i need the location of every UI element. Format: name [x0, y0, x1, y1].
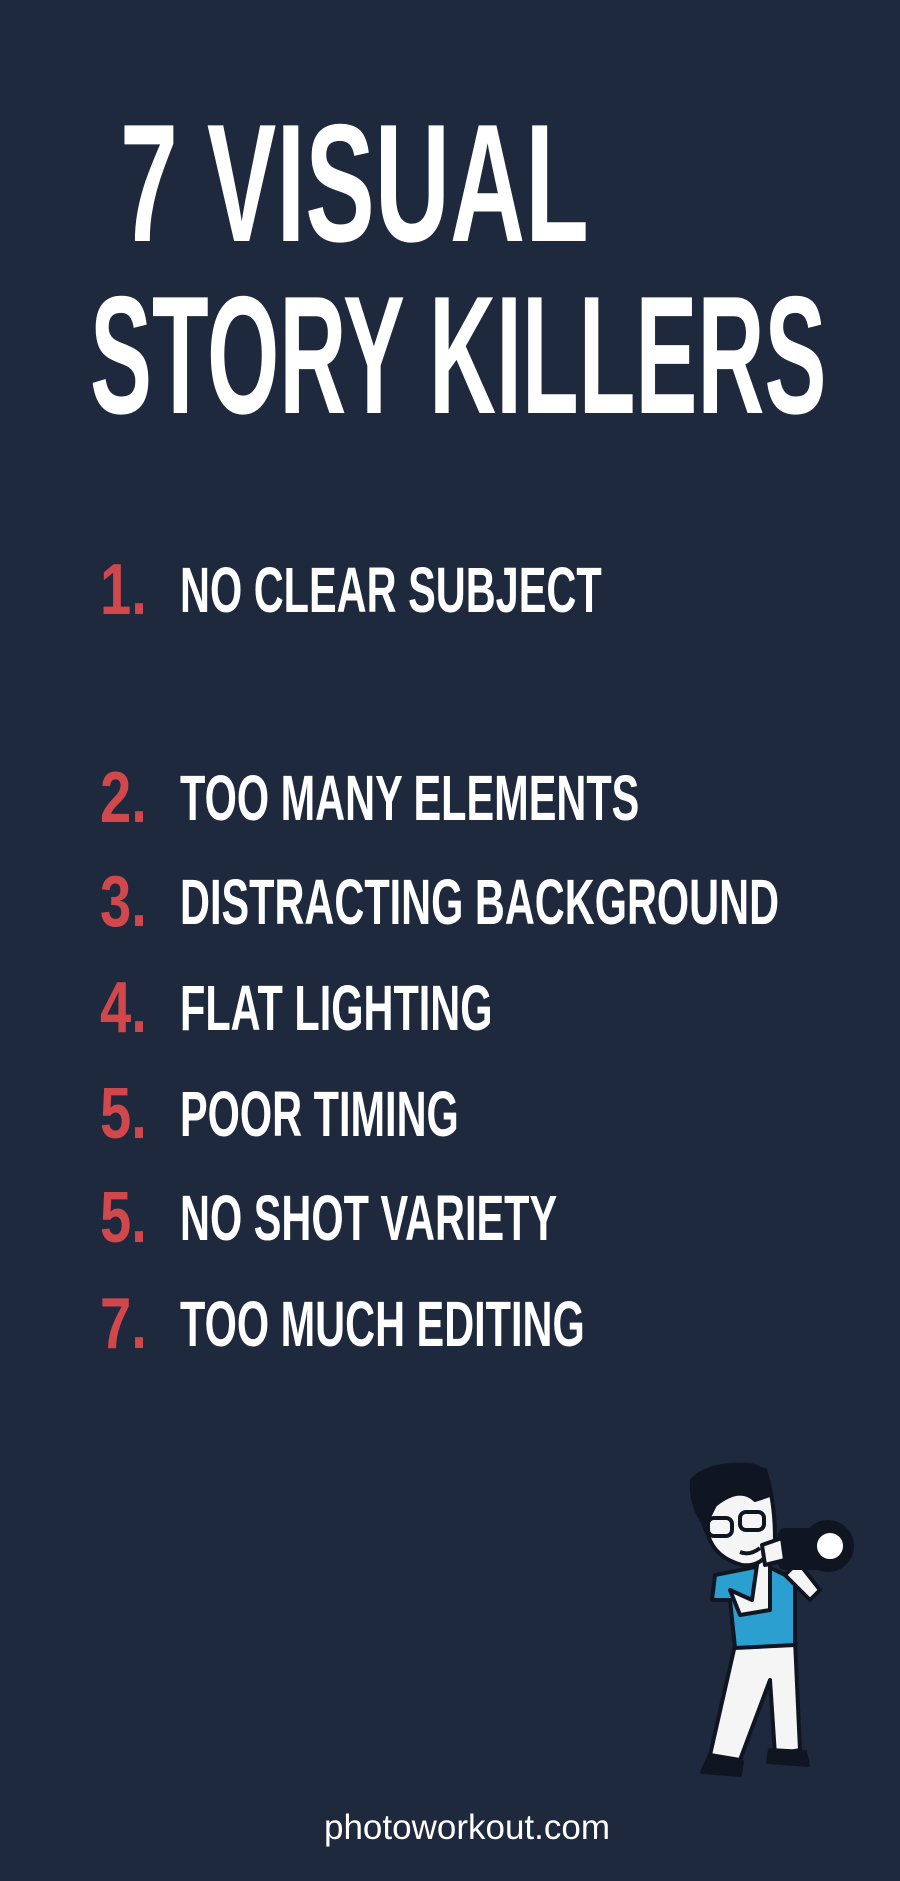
item 4: 4. — [100, 968, 147, 1048]
camera — [780, 1530, 820, 1568]
title: STORY KILLERS — [90, 261, 826, 449]
item 6: 5. — [100, 1178, 147, 1258]
legs — [710, 1640, 800, 1760]
list — [100, 550, 779, 1364]
item 5: POOR TIMING — [180, 1078, 459, 1150]
item 1: 1. — [100, 550, 147, 630]
item 7: TOO MUCH EDITING — [180, 1288, 585, 1360]
item 6: NO SHOT VARIETY — [180, 1182, 557, 1254]
head — [701, 1467, 775, 1565]
item 1: NO CLEAR SUBJECT — [180, 554, 602, 626]
item 5 — [100, 1074, 459, 1154]
item 3: DISTRACTING BACKGROUND — [180, 866, 779, 938]
item 7: 7. — [100, 1284, 147, 1364]
item 4: FLAT LIGHTING — [180, 972, 493, 1044]
icon: photographer character — [690, 1462, 854, 1777]
title: 7 VISUAL — [120, 89, 589, 277]
item 2: 2. — [100, 758, 147, 838]
item 3: 3. — [100, 862, 147, 942]
item 5: 5. — [100, 1074, 147, 1154]
footer: photoworkout.com — [324, 1808, 610, 1847]
arm — [730, 1558, 770, 1615]
shirt — [712, 1565, 795, 1648]
item 2: TOO MANY ELEMENTS — [180, 762, 639, 834]
glasses — [708, 1518, 732, 1536]
title — [90, 89, 826, 449]
